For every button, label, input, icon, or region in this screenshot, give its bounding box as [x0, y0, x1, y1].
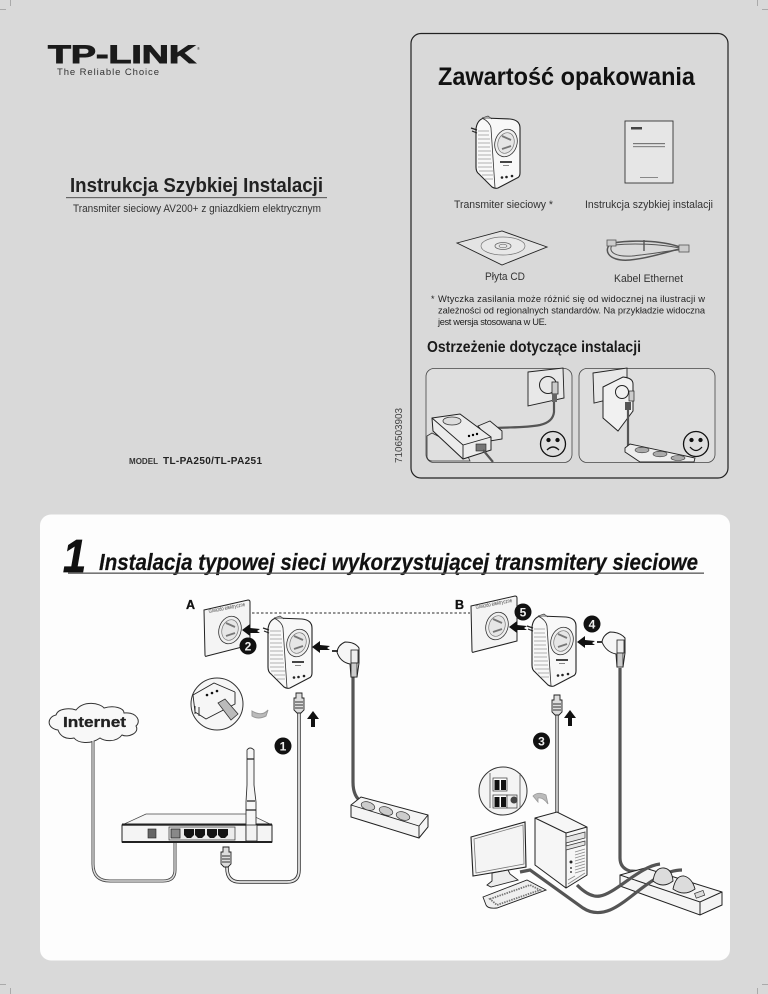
keyboard: [483, 880, 546, 908]
section title: Instalacja typowej sieci wykorzystującej transmitery sieciowe: [99, 549, 698, 575]
ethernet cable 1: [221, 693, 304, 882]
antenna: [246, 748, 257, 841]
step numbers: 5: [520, 606, 527, 620]
label: manual: Instrukcja szybkiej instalacji: [585, 199, 713, 211]
adapter B: [527, 614, 577, 686]
model number: MODEL: [129, 457, 158, 466]
router: [122, 748, 272, 843]
footnote: Wtyczka zasilania może różnić się od widocznej na ilustracji w: [438, 294, 705, 304]
footnote: [431, 294, 706, 327]
computer power cables: [520, 864, 682, 913]
adapter A: [263, 616, 313, 688]
label: adapter: Transmiter sieciowy *: [454, 199, 554, 211]
internet cloud: [49, 703, 138, 743]
label A: A: [186, 598, 195, 612]
TP-LINK logo: [48, 41, 200, 78]
ethernet cable 3: [552, 695, 562, 813]
step numbers: 4: [589, 618, 596, 632]
monitor: [471, 822, 526, 887]
icon: happy face: [684, 432, 708, 456]
footnote: *: [431, 294, 435, 304]
subtitle: Transmiter sieciowy AV200+ z gniazdkiem elektrycznym: [73, 203, 321, 215]
computer tower: [535, 812, 587, 888]
outlet A: [204, 600, 250, 656]
heading: installation warning: Ostrzeżenie dotyczące instalacji: [427, 339, 641, 356]
step numbers: 1: [280, 740, 287, 754]
section title: [63, 530, 704, 582]
panel: correct installation: [579, 368, 715, 462]
dashed link between outlets: [252, 612, 470, 614]
step numbers: [240, 604, 600, 754]
model number: TL-PA250/TL-PA251: [163, 456, 262, 467]
internet cloud: Internet: [63, 715, 126, 731]
arrow up A: [307, 711, 319, 727]
outlet B: Gniazdo elektryczne: [475, 598, 513, 611]
TP-LINK logo: TP-LINK: [48, 41, 196, 69]
document code: 7106503903: [393, 408, 405, 463]
panel: package contents: [411, 34, 728, 478]
label: CD: Płyta CD: [485, 271, 525, 283]
label: cable: Kabel Ethernet: [614, 273, 683, 285]
TP-LINK logo: The Reliable Choice: [57, 67, 159, 78]
power plug and cord B: [597, 632, 645, 872]
icon: manual: [625, 121, 673, 183]
heading: package contents: Zawartość opakowania: [438, 63, 696, 91]
power plug and cord A: [332, 642, 362, 802]
main title: Instrukcja Szybkiej Instalacji: [70, 175, 323, 197]
outlet B: [471, 596, 517, 652]
insertion arrows: [242, 621, 595, 653]
curved arrow B: [533, 793, 548, 804]
power strip A: [351, 797, 428, 838]
internet cable: [93, 741, 175, 881]
section title: 1: [63, 530, 86, 582]
footnote: zależności od regionalnych standardów. Na przykładzie widoczna: [438, 306, 706, 316]
outlet A: Gniazdo elektryczne: [208, 602, 246, 615]
footnote: jest wersja stosowana w UE.: [437, 317, 547, 327]
TP-LINK logo: ®: [197, 46, 200, 51]
power strip B: [620, 868, 722, 915]
label B: B: [455, 598, 464, 612]
panel: installation diagram: [40, 514, 730, 960]
curved arrow A: [252, 710, 268, 718]
step numbers: 2: [245, 640, 252, 654]
icon: CD: [457, 231, 547, 265]
inset: adapter port: [191, 678, 243, 730]
inset: computer ports: [479, 767, 527, 815]
icon: sad face: [540, 432, 566, 456]
icon: ethernet cable: [607, 240, 689, 260]
panel: wrong installation: [426, 368, 572, 462]
icon: powerline adapter: [471, 116, 521, 188]
step numbers: 3: [538, 734, 545, 748]
arrow up B: [564, 710, 576, 726]
plugs in power strip: [653, 868, 695, 893]
